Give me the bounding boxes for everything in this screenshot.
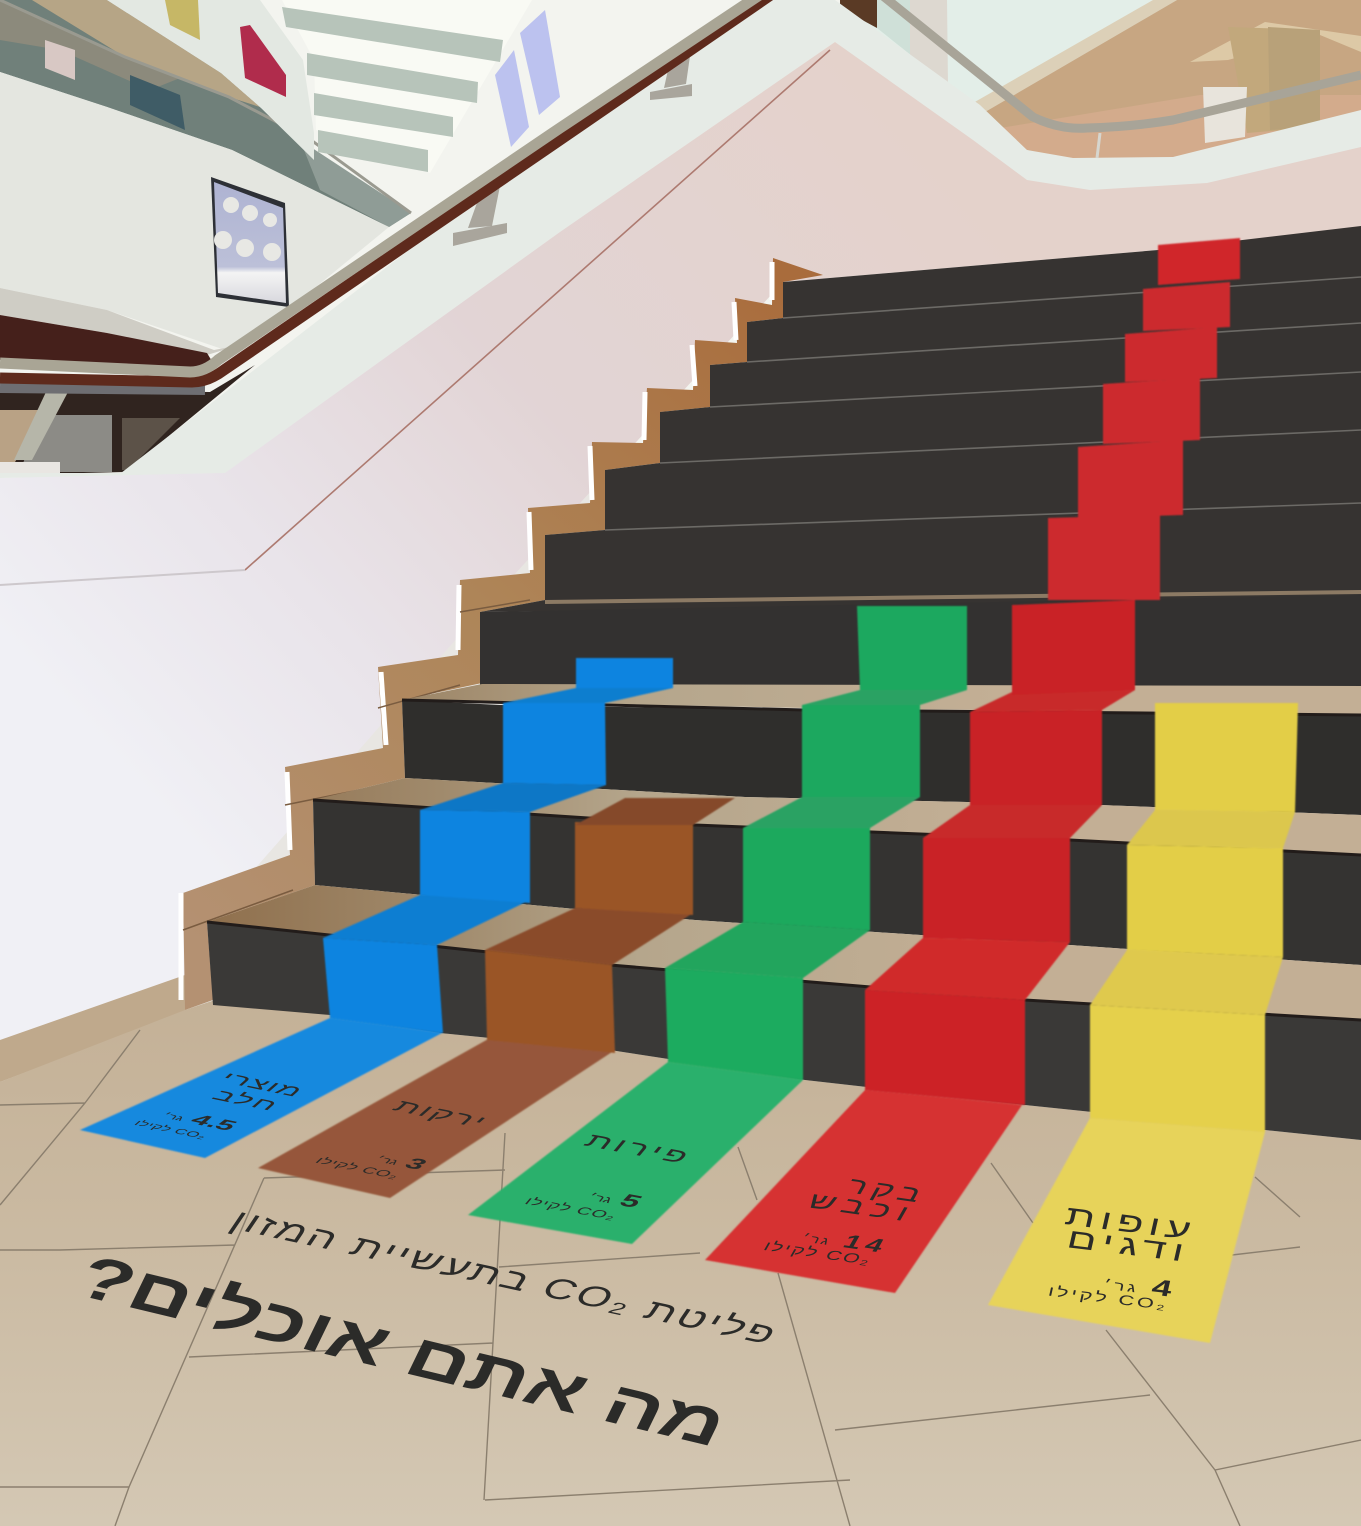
label: vegetables: ירקות [387, 1097, 495, 1132]
label: fruit [522, 1130, 698, 1222]
label: dairy: 4.5 גר׳ [158, 1106, 242, 1134]
bar: dairy (blue) [80, 658, 673, 1158]
label: poultry and fish [1047, 1199, 1200, 1313]
upper balcony ceiling and glass rail [0, 0, 411, 227]
label: poultry and fish: 4 גר׳ [1101, 1269, 1177, 1302]
label: fruit: 5 גר׳ [584, 1185, 647, 1212]
label: dairy [132, 1069, 310, 1141]
label: beef and lamb: וכבש [803, 1187, 922, 1227]
label: vegetables: 3 גר׳ [370, 1149, 432, 1173]
title: מה אתם אוכלים? [67, 1243, 738, 1459]
white curved shop wall with logos [96, 0, 314, 160]
label: beef and lamb [761, 1172, 933, 1268]
stairs: lower treads and risers [207, 595, 1361, 1140]
background: mall interior [0, 0, 1361, 480]
lower level shopfronts [0, 288, 255, 475]
lilac wall recesses [495, 10, 560, 147]
label: dairy: חלב [207, 1086, 286, 1114]
parapet top band [0, 0, 1361, 478]
handrail right [883, 0, 1361, 158]
label: vegetables: CO₂ לקילו [312, 1156, 403, 1181]
bar: poultry and fish (yellow) [988, 703, 1298, 1343]
digital screen [211, 177, 289, 307]
baseboard [0, 975, 185, 1082]
bar: beef and lamb (red) [705, 238, 1240, 1293]
wooden stringer steps along wall [181, 258, 823, 1010]
label: fruit: CO₂ לקילו [522, 1195, 620, 1222]
label: beef and lamb: 14 גר׳ [798, 1226, 893, 1257]
label: vegetables [312, 1097, 495, 1181]
bar: vegetables (brown) [258, 798, 735, 1198]
upper right mezzanine [840, 0, 1361, 200]
handrail left [0, 0, 775, 390]
staircase side wall [0, 42, 1361, 1040]
label: beef and lamb: בקר [842, 1172, 933, 1208]
bar: fruit (green) [468, 606, 967, 1244]
stairs: upper dark flights [480, 226, 1361, 612]
label: beef and lamb: CO₂ לקילו [761, 1239, 875, 1268]
label: poultry and fish: CO₂ לקילו [1047, 1283, 1170, 1313]
label: dairy: CO₂ לקילו [132, 1119, 210, 1141]
floor [0, 1000, 1361, 1526]
curved white balcony front [0, 72, 389, 355]
label: poultry and fish: ודגים [1064, 1222, 1194, 1268]
label: fruit: פירות [579, 1130, 698, 1168]
skylight with ceiling beams [282, 0, 532, 173]
label: dairy: מוצרי [215, 1069, 310, 1100]
label: poultry and fish: עופות [1062, 1199, 1200, 1246]
subtitle: פליטת CO₂ בתעשיית המזון [223, 1204, 786, 1351]
